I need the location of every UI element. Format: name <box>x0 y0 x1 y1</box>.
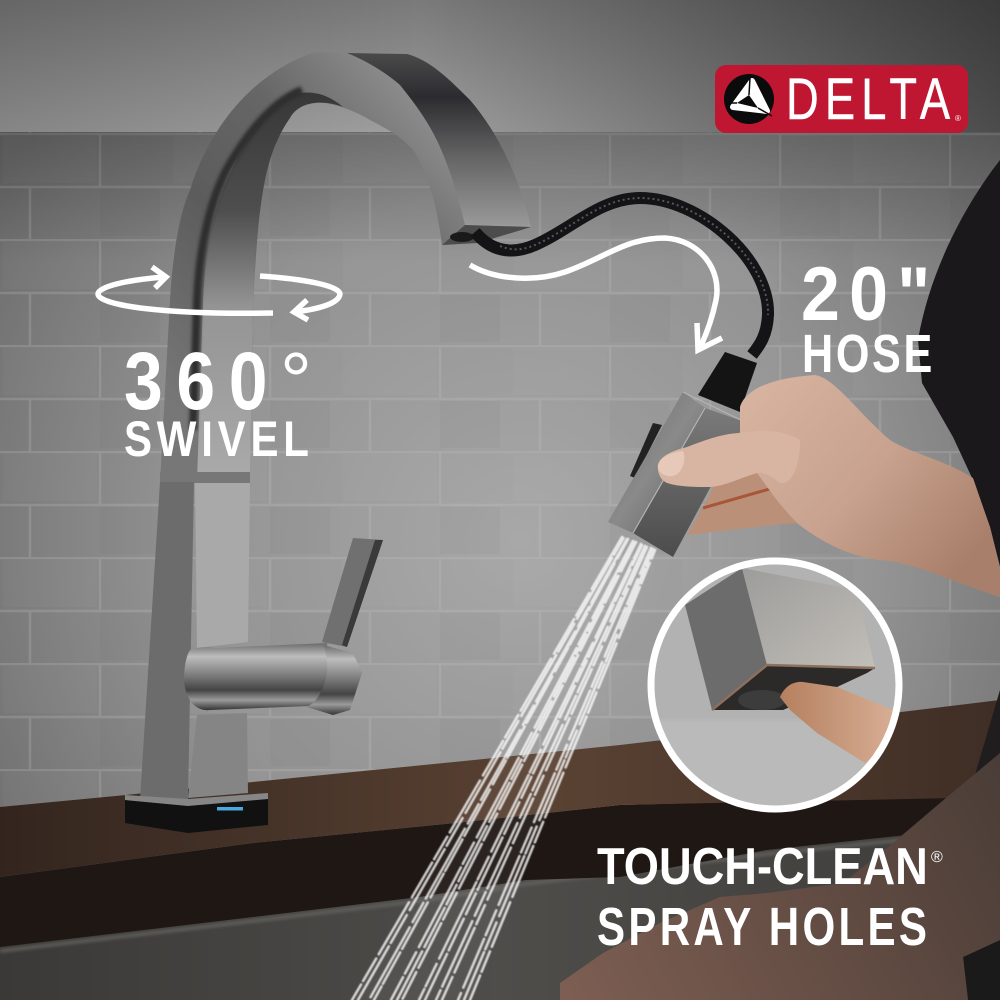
label: 20 inch hose: HOSE <box>802 325 935 384</box>
hose collar <box>698 352 757 412</box>
Delta logo <box>715 65 968 133</box>
spout side face <box>347 53 531 227</box>
label: 360 degree swivel: 360 <box>124 336 281 427</box>
spray head <box>608 352 757 557</box>
faucet base <box>125 793 268 833</box>
label: 20 inch hose: 20" <box>801 252 940 337</box>
faucet lower body left face <box>140 482 194 800</box>
label: touch-clean spray holes: SPRAY HOLES <box>597 897 930 957</box>
head right face <box>633 408 745 557</box>
water spray <box>352 537 658 1000</box>
inset circle: touch-clean spray holes <box>640 561 910 820</box>
lower arm and hand in sink <box>560 753 1000 1000</box>
faucet lower body right face <box>195 483 250 648</box>
collar <box>160 472 250 483</box>
countertop and sink <box>0 700 1000 1000</box>
spray head close-up <box>685 568 767 710</box>
side button <box>630 423 662 478</box>
label: 20 inch hose <box>801 252 940 384</box>
fingertip <box>780 682 893 763</box>
woman's dark clothing <box>918 160 1000 567</box>
Delta logo: ® <box>955 114 961 123</box>
handle cylinder <box>184 643 335 710</box>
handle end cap <box>307 645 362 715</box>
label: 360 degree swivel: SWIVEL <box>124 411 314 467</box>
label: 360 degree swivel: ° <box>280 336 312 425</box>
icon: Delta emblem <box>724 74 774 124</box>
faucet <box>125 52 531 833</box>
label: touch-clean spray holes <box>597 838 943 957</box>
label: 360 degree swivel <box>124 336 314 467</box>
handle lever <box>322 538 383 647</box>
head left face <box>608 392 705 533</box>
lower fingers and palm behind spray head <box>687 425 797 535</box>
label: touch-clean spray holes: ® <box>931 849 943 866</box>
faucet arch silhouette <box>160 52 531 482</box>
Delta logo: DELTA <box>786 68 956 132</box>
label: touch-clean spray holes: TOUCH-CLEAN <box>597 838 928 896</box>
thumb <box>658 431 800 487</box>
hose <box>475 198 768 355</box>
hand holding spray head <box>658 375 1000 597</box>
arrow: hose reach <box>470 238 722 350</box>
arch inner face <box>197 92 343 482</box>
arrow: 360 swivel <box>98 267 340 320</box>
